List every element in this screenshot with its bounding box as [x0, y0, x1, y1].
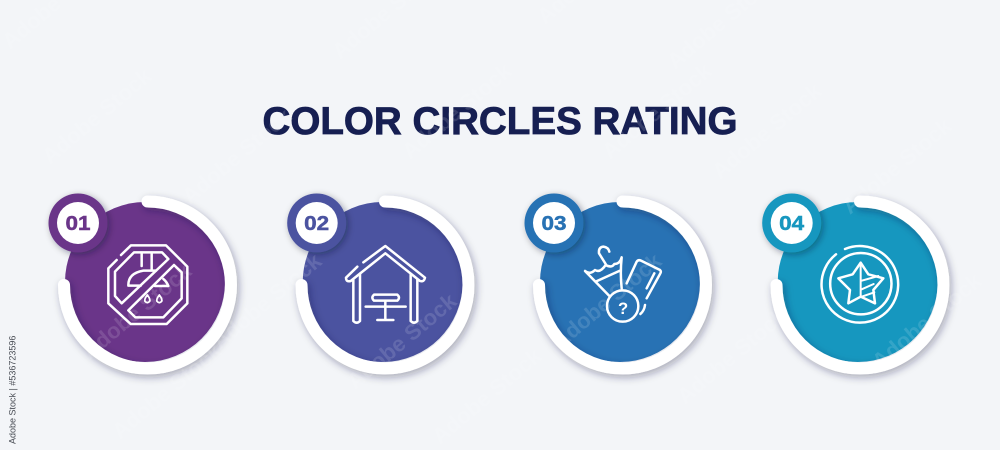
watermark text: Adobe Stock: [427, 343, 547, 449]
badge 03: [524, 194, 584, 252]
panel: 03: [524, 194, 706, 368]
circle 04: [778, 202, 938, 362]
badge 04: 04: [779, 212, 805, 235]
icon: star in circle: [822, 246, 898, 323]
circle 03: [540, 202, 700, 362]
stock id caption: Adobe Stock | #536723596: [8, 336, 18, 444]
title: COLOR CIRCLES RATING: [262, 100, 738, 143]
watermark text: Adobe Stock: [177, 103, 297, 209]
badge 01: [48, 194, 108, 252]
watermark text: Adobe Stock: [37, 63, 157, 169]
progress ring 04: [776, 202, 944, 368]
circle 02: [303, 202, 463, 362]
watermark text: Adobe Stock: [207, 248, 327, 354]
progress ring 03: [539, 202, 706, 368]
watermark text: Adobe Stock: [547, 248, 667, 354]
progress ring 01: [64, 202, 231, 368]
watermark text: Adobe Stock: [77, 258, 197, 364]
watermark text: Adobe Stock: [397, 58, 517, 164]
icon: umbrella, card and question mark: [585, 247, 661, 322]
watermark text: Adobe Stock: [867, 268, 987, 374]
icon: umbrella, card and question mark: ?: [618, 299, 628, 318]
badge 03: 03: [542, 212, 566, 235]
watermark text: Adobe Stock: [342, 288, 462, 394]
circle 01: [65, 202, 225, 362]
panel: 02: [287, 194, 469, 368]
watermark text: Adobe Stock: [597, 58, 717, 164]
watermark text: Adobe Stock: [107, 338, 227, 444]
icon: house with table: [346, 246, 425, 323]
watermark text: Adobe Stock: [707, 78, 827, 184]
watermark text: Adobe Stock: [672, 303, 792, 409]
watermark text: Adobe Stock: [837, 113, 957, 219]
badge 02: 02: [304, 212, 329, 235]
badge 04: [762, 194, 821, 252]
icon: no ironing: [108, 245, 187, 324]
badge 01: 01: [66, 212, 90, 235]
panel: 01: [48, 194, 231, 368]
panel: 04: [762, 194, 944, 368]
progress ring 02: [302, 202, 469, 368]
badge 02: [287, 194, 346, 252]
